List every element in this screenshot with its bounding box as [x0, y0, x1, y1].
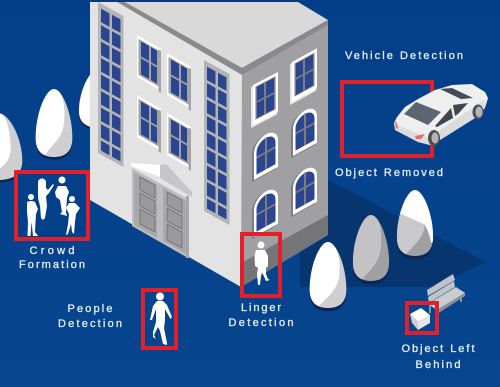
tall window left — [98, 2, 124, 167]
rear window — [404, 102, 441, 125]
linger detection box — [242, 234, 280, 296]
object left behind box — [407, 303, 437, 333]
window R1 — [251, 72, 278, 128]
label: vehicle detection: Vehicle Detection — [345, 50, 463, 62]
door with pediment — [131, 163, 192, 258]
rear wheel — [428, 130, 440, 146]
door frame — [132, 168, 188, 258]
window A — [137, 35, 161, 93]
window B — [167, 53, 191, 111]
window R4 — [291, 104, 317, 158]
crowd formation box — [16, 172, 88, 239]
bollard 1 — [0, 113, 22, 183]
side windows — [435, 108, 453, 127]
car — [394, 84, 488, 146]
pediment — [131, 163, 192, 196]
label: object removed: Object Removed — [335, 167, 443, 179]
window R5 — [252, 185, 278, 239]
vehicle detection box — [342, 82, 432, 156]
label: linger: Linger — [241, 302, 281, 314]
right wall — [241, 22, 328, 287]
standing person — [254, 242, 270, 285]
upper windows — [137, 35, 191, 171]
person 3 — [55, 176, 69, 216]
window R3 — [252, 128, 278, 182]
label: object left: Object Left — [402, 343, 474, 355]
bollard 6 — [396, 190, 434, 260]
bench — [427, 274, 465, 314]
left wall — [90, 0, 242, 287]
label: behind: Behind — [416, 359, 460, 371]
tall window right — [204, 60, 230, 225]
car sill and rear face — [395, 100, 485, 145]
person 1 — [27, 194, 38, 236]
label: detection: Detection — [58, 318, 122, 330]
label: crowd: Crowd — [30, 245, 74, 257]
building — [90, 0, 328, 287]
window D — [167, 113, 191, 171]
wall base — [241, 215, 328, 287]
tail lights — [415, 134, 425, 139]
person 4 — [66, 196, 80, 235]
label: detection: Detection — [228, 317, 294, 329]
window R6 — [291, 163, 317, 217]
bollard 5 — [351, 215, 389, 284]
front wheel — [472, 104, 484, 120]
roof — [117, 2, 328, 68]
abandoned package — [410, 308, 430, 330]
right wall windows — [251, 48, 317, 239]
people detection box — [143, 290, 176, 348]
bollard 3 — [79, 68, 121, 130]
building shadow — [300, 178, 486, 287]
label: people: People — [68, 303, 112, 315]
window R2 — [290, 48, 317, 105]
bollards left — [0, 74, 90, 183]
roof — [440, 88, 473, 99]
person 2 — [38, 178, 54, 220]
roof edge — [117, 2, 328, 75]
bollard 2 — [34, 89, 72, 160]
bollards right — [308, 187, 435, 311]
bollard 4 — [308, 242, 346, 311]
walking person — [150, 292, 172, 345]
label: formation: Formation — [19, 259, 85, 271]
window C — [137, 95, 161, 153]
crowd silhouettes — [27, 176, 80, 236]
car body — [394, 84, 488, 145]
